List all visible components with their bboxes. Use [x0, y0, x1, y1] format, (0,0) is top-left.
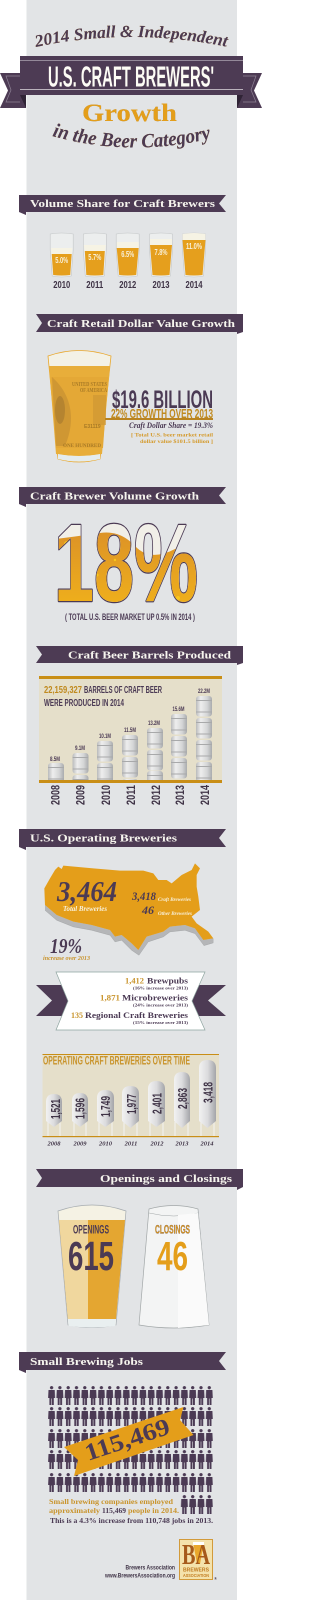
- market note: [ Total U.S. beer market retail: [131, 432, 214, 438]
- keg stack 2013: [171, 706, 187, 778]
- pint glass chart: [50, 233, 206, 291]
- regional note: (15% increase over 2013): [133, 1020, 189, 1025]
- tank 2013: 2,863: [176, 1088, 190, 1109]
- section ribbon: barrels: [36, 646, 243, 665]
- big beer glass with dollar bill: [48, 350, 111, 462]
- pint 2011: [83, 233, 106, 291]
- section ribbon: barrels: Craft Beer Barrels Produced: [68, 650, 232, 662]
- tank 2012: 2,401: [150, 1093, 164, 1114]
- 19% increase: increase over 2013: [43, 956, 90, 962]
- title word: Growth: Growth: [82, 100, 177, 127]
- tank 2010: 1,749: [99, 1096, 113, 1117]
- barrels year axis: 2010: [99, 785, 113, 805]
- keg stack 2009: [72, 746, 88, 780]
- section ribbon: operating breweries: [19, 829, 226, 850]
- section ribbon: openings and closings: [36, 1169, 243, 1190]
- barrels year axis: 2012: [149, 785, 163, 805]
- barrels year axis: 2014: [198, 785, 212, 805]
- tanks year axis: 2010: [98, 1140, 113, 1148]
- keg stack 2009: 9.1M: [75, 745, 85, 752]
- Brewers Association logo: ASSOCIATION: [183, 1573, 209, 1578]
- tank 2011: 1,977: [125, 1094, 139, 1114]
- Brewers Association logo: [180, 1539, 212, 1580]
- tank 2014: [199, 1060, 216, 1128]
- big beer glass with dollar bill: E31119: [84, 424, 101, 430]
- big beer glass with dollar bill: ONE HUNDRED: [63, 444, 101, 449]
- pint 2014: [182, 233, 206, 291]
- jobs line 2: approximately: [49, 1507, 101, 1515]
- brewpubs: 1,412: [125, 976, 144, 986]
- pint 2011: 5.7%: [88, 252, 102, 262]
- dollar share: Craft Dollar Share = 19.3%: [129, 421, 213, 430]
- craft breweries label: Craft Breweries: [158, 897, 191, 903]
- keg stack 2008: 8.5M: [50, 756, 60, 763]
- big beer glass with dollar bill: OF AMERICA: [80, 388, 107, 394]
- registered mark: ®: [214, 1576, 217, 1581]
- other breweries count: 46: [141, 903, 154, 917]
- other breweries label: Other Breweries: [158, 911, 192, 917]
- total breweries: 3,464: [56, 877, 117, 908]
- tank 2010: [97, 1090, 114, 1127]
- jobs line 1: Small brewing companies employed: [49, 1498, 173, 1506]
- big beer glass with dollar bill: UNITED STATES: [72, 382, 107, 388]
- keg stack 2010: 10.1M: [99, 733, 111, 740]
- title: [0, 25, 262, 149]
- jobs line 2: 115,469: [102, 1507, 127, 1515]
- pint 2014: 2014: [186, 280, 203, 291]
- pint 2010: 5.0%: [55, 255, 68, 265]
- jobs line 3: This is a 4.3% increase from 110,748 jobs in 2013.: [50, 1517, 213, 1525]
- jobs ribbon: [64, 1407, 194, 1476]
- keg stack 2014: 22.2M: [198, 688, 210, 695]
- openings value: 615: [68, 1233, 114, 1279]
- keg stack 2012: [147, 720, 163, 780]
- tank 2008: 1,521: [49, 1099, 63, 1119]
- pint 2013: 7.8%: [154, 247, 168, 257]
- brewery types banner: [36, 972, 226, 1030]
- Brewers Association logo: BA: [182, 1539, 210, 1571]
- tanks year axis: 2012: [150, 1140, 164, 1148]
- dollar value figures: [105, 386, 214, 445]
- section ribbon: small brewing jobs: [19, 1352, 226, 1373]
- barrels headline: 22,159,327: [44, 685, 82, 696]
- pint 2013: [150, 233, 172, 291]
- section ribbon: dollar value: Craft Retail Dollar Value Growth: [47, 319, 236, 330]
- title line: in the Beer Category: in the Beer Category: [52, 124, 210, 149]
- closings glass: [139, 1206, 209, 1328]
- tanks year axis: 2014: [200, 1140, 214, 1148]
- pint 2010: 2010: [53, 280, 71, 291]
- tanks year axis: 2011: [124, 1140, 137, 1148]
- tank legs: [48, 1122, 214, 1136]
- background panel: [26, 0, 237, 1600]
- barrels year axis: 2008: [48, 785, 62, 805]
- tanks chart panel: [42, 1054, 219, 1137]
- microbreweries: 1,871: [100, 994, 120, 1002]
- regional craft breweries: 135: [71, 1011, 83, 1020]
- tanks year axis: [46, 1140, 214, 1148]
- pint 2013: 2013: [152, 280, 170, 291]
- section ribbon: openings and closings: Openings and Closings: [100, 1174, 232, 1185]
- section ribbon: operating breweries: U.S. Operating Breweries: [30, 834, 177, 844]
- keg stack 2014: [196, 688, 212, 782]
- main ribbon: [0, 56, 262, 108]
- brewpubs note: (16% increase over 2013): [133, 986, 189, 990]
- people grid: [48, 1386, 214, 1514]
- regional craft breweries: Regional Craft Breweries: [85, 1011, 188, 1020]
- barrels headline: BARRELS OF CRAFT BEER: [84, 685, 162, 696]
- pint 2011: 2011: [86, 280, 104, 291]
- section ribbon: small brewing jobs: Small Brewing Jobs: [30, 1357, 143, 1368]
- jobs line 2: people in 2014.: [128, 1507, 179, 1515]
- openings glass: [58, 1205, 126, 1328]
- keg stack 2011: 11.5M: [124, 727, 136, 734]
- microbreweries note: (24% increase over 2013): [133, 1002, 189, 1008]
- pint 2012: 6.5%: [121, 249, 134, 259]
- footer credit: www.BrewersAssociation.org: [104, 1572, 175, 1580]
- openings label: OPENINGS: [73, 1222, 109, 1236]
- barrels headline: WERE PRODUCED IN 2014: [44, 698, 124, 709]
- big number 18%: [58, 522, 197, 604]
- barrels year axis: 2009: [74, 785, 88, 805]
- keg stack 2008: [48, 756, 64, 780]
- tank 2013: [174, 1072, 190, 1128]
- tank 2008: [46, 1094, 63, 1127]
- pint 2012: 2012: [119, 280, 137, 291]
- growth rule: [105, 418, 213, 420]
- section ribbon: volume growth: Craft Brewer Volume Growth: [30, 492, 200, 502]
- jobs ribbon: 115,469: [82, 1414, 173, 1467]
- section ribbon: dollar value: [36, 314, 243, 334]
- brewpubs: Brewpubs: [147, 976, 188, 986]
- tank 2014: 3,418: [202, 1082, 216, 1103]
- craft breweries count: 3,418: [131, 889, 156, 903]
- barrels year axis: [48, 785, 212, 805]
- barrels year axis: 2011: [124, 785, 138, 805]
- tank 2009: [72, 1093, 88, 1127]
- tank 2011: [122, 1086, 139, 1128]
- tank 2009: 1,596: [74, 1098, 88, 1119]
- closings value: 46: [157, 1233, 188, 1279]
- barrels chart panel: [39, 676, 222, 783]
- Brewers Association logo: BREWERS: [183, 1568, 209, 1574]
- total breweries label: Total Breweries: [63, 905, 107, 913]
- tanks year axis: 2008: [46, 1140, 61, 1148]
- section ribbon: volume growth: [19, 487, 226, 507]
- section ribbon: volume share: Volume Share for Craft Brewers: [30, 199, 215, 210]
- title line: 2014 Small & Independent: 2014 Small & Independent: [36, 25, 228, 47]
- volume growth note: ( TOTAL U.S. BEER MARKET UP 0.5% IN 2014 ): [65, 612, 195, 622]
- keg stack 2011: [122, 728, 138, 780]
- section ribbon: volume share: [19, 195, 226, 215]
- barrels year axis: 2013: [173, 785, 187, 805]
- footer credit: [104, 1564, 175, 1580]
- tanks year axis: 2013: [174, 1140, 189, 1148]
- keg stack 2013: 15.6M: [172, 706, 184, 713]
- pint 2012: [116, 233, 139, 291]
- market note: dollar value $101.5 billion ]: [140, 438, 213, 445]
- 19% increase: 19%: [50, 934, 82, 958]
- jobs description: [49, 1498, 213, 1525]
- tanks year axis: 2009: [72, 1140, 87, 1148]
- closings label: CLOSINGS: [155, 1222, 190, 1236]
- keg stack 2010: [97, 733, 113, 784]
- tank 2012: [148, 1081, 165, 1127]
- keg stack 2012: 13.2M: [148, 720, 160, 727]
- footer credit: Brewers Association: [126, 1564, 175, 1572]
- pint 2010: [50, 233, 73, 291]
- pint 2014: 11.0%: [186, 241, 202, 251]
- microbreweries: Microbreweries: [122, 994, 188, 1002]
- US map: [44, 863, 213, 955]
